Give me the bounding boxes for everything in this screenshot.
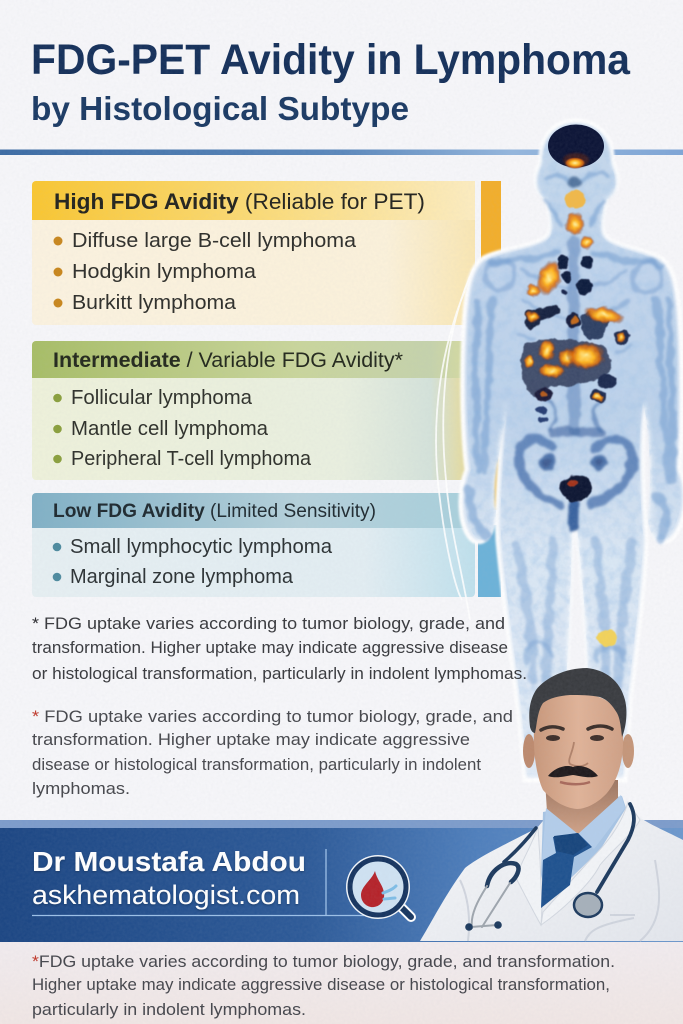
body halo: [461, 121, 683, 780]
website: askhematologist.com: [32, 880, 300, 910]
tissue mottling: [466, 125, 681, 774]
mouth: [560, 782, 590, 784]
heading: low: Low FDG Avidity (Limited Sensitivity): [53, 501, 376, 522]
bottom footnote strip: [0, 942, 683, 1024]
brows and eyes: [541, 726, 612, 741]
panel body: low: [32, 493, 475, 597]
list: high: [54, 230, 357, 314]
footnote 2: lymphomas.: [32, 779, 130, 798]
bottom footnote text: *FDG uptake varies according to tumor biology, grade, and transformation.: [32, 952, 615, 971]
tie knot: [554, 833, 588, 855]
moustache: [548, 766, 598, 777]
panel: high FDG avidity: [32, 181, 475, 325]
list: intermediate: Mantle cell lymphoma: [71, 418, 269, 440]
footer dividers: [32, 849, 366, 916]
list: high: Hodgkin lymphoma: [72, 261, 257, 283]
title: [31, 36, 631, 127]
brain uptake: [548, 124, 604, 168]
title: by Histological Subtype: [31, 90, 409, 127]
list: intermediate: [53, 387, 312, 470]
PET body figure: [461, 121, 683, 780]
footnote 1: [32, 614, 527, 683]
title: FDG-PET Avidity in Lymphoma: [31, 36, 631, 84]
doctor portrait: [420, 668, 683, 941]
panel: low FDG avidity: [32, 493, 475, 597]
panel body: intermediate: [32, 341, 475, 480]
footer band: [0, 820, 683, 942]
footnote 1: * FDG uptake varies according to tumor biology, grade, and: [32, 614, 505, 633]
lungs and dark lesions: [525, 255, 630, 501]
icon: magnifier with blood drop: [346, 855, 411, 919]
coat lapels: [517, 802, 640, 925]
list: intermediate: Peripheral T-cell lymphoma: [71, 448, 312, 470]
panel header: high: [32, 181, 475, 220]
neck: [545, 780, 618, 834]
hair: [529, 668, 626, 737]
tie: [541, 833, 592, 908]
heading: high: High FDG Avidity (Reliable for PET): [54, 189, 425, 214]
footnote 2: [32, 707, 513, 798]
list: high: Burkitt lymphoma: [72, 292, 237, 314]
nose: [569, 742, 588, 766]
bottom footnote text: [32, 952, 615, 1019]
footnote 2: * FDG uptake varies according to tumor biology, grade, and: [32, 707, 513, 726]
liver: [521, 339, 610, 396]
panel body: high: [32, 181, 475, 325]
shirt collar: [542, 795, 625, 880]
list: low: Small lymphocytic lymphoma: [70, 536, 333, 558]
heading: intermediate: Intermediate / Variable FDG Avidity*: [53, 349, 403, 372]
face: [534, 694, 623, 809]
body tissue: [464, 124, 682, 776]
list: low: Marginal zone lymphoma: [70, 566, 294, 588]
ears: [523, 734, 535, 768]
bottom footnote text: Higher uptake may indicate aggressive disease or histological transformation,: [32, 975, 610, 994]
header rule: [0, 150, 683, 155]
stethoscope: [465, 804, 634, 931]
shirt: [541, 796, 626, 900]
side colour bars: [478, 181, 501, 597]
skeleton and vessels: [468, 173, 673, 690]
list: low: [53, 536, 333, 588]
footnote 1: or histological transformation, particularly in indolent lymphomas.: [32, 664, 527, 683]
white coat: [420, 800, 683, 941]
hot spots: [524, 190, 626, 646]
decorative white body contour: [436, 268, 474, 620]
list: high: Diffuse large B-cell lymphoma: [72, 230, 357, 252]
footnote 2: disease or histological transformation, particularly in indolent: [32, 755, 481, 774]
panel header: low: [32, 493, 475, 528]
author name: Dr Moustafa Abdou: [32, 846, 306, 877]
footnote 1: transformation. Higher uptake may indicate aggressive disease: [32, 638, 508, 657]
bottom footnote text: particularly in indolent lymphomas.: [32, 1000, 306, 1019]
panel: intermediate FDG avidity: [32, 341, 475, 480]
panel header: intermediate: [32, 341, 475, 378]
coat shading: [460, 860, 659, 941]
footnote 2: transformation. Higher uptake may indicate aggressive: [32, 730, 470, 749]
list: intermediate: Follicular lymphoma: [71, 387, 253, 409]
